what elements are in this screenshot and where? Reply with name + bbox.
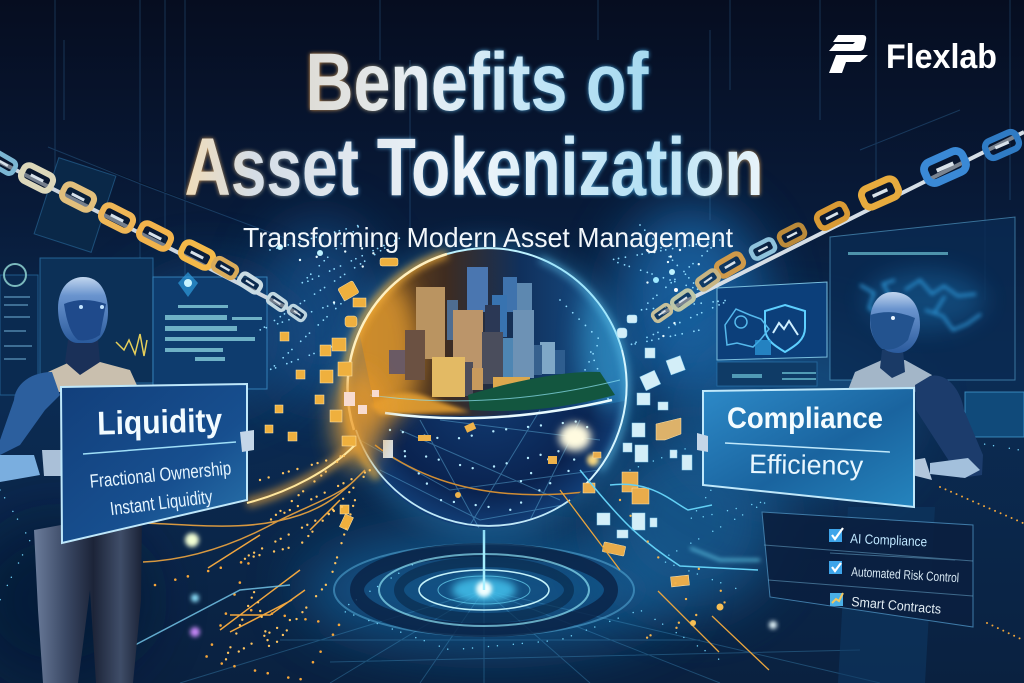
panel: compliance: [703, 388, 914, 507]
left and right panel grip hands: [240, 430, 708, 452]
icon: gear network: [725, 309, 769, 347]
panel heading: compliance: Compliance: [727, 402, 883, 435]
robot head: [58, 277, 108, 343]
logo wordmark: Flexlab: [886, 38, 997, 76]
check item: automated risk control: Automated Risk Control: [851, 564, 960, 585]
robot torso: [48, 362, 140, 392]
robot legs: [34, 510, 142, 683]
equator band: [385, 400, 612, 418]
check item: smart contracts: Smart Contracts: [851, 594, 942, 617]
robot hand: [42, 450, 75, 476]
icon: shield: [765, 305, 805, 352]
robot hand: [901, 458, 932, 480]
checklist panel: [762, 512, 973, 627]
left dashboards: [0, 158, 267, 395]
globe rim: [346, 254, 447, 478]
gold token stream: [135, 258, 398, 680]
panel: liquidity: [61, 384, 247, 543]
check item: automated risk control: [829, 561, 960, 585]
title: Benefits of: [306, 37, 649, 128]
star particles: [0, 225, 1020, 660]
floor radar rings: [180, 530, 880, 683]
blue and white token stream: [560, 315, 1023, 670]
robot lower body: [838, 507, 935, 683]
subtitle: Transforming Modern Asset Management: [243, 222, 733, 253]
title: Benefits of: [306, 37, 649, 128]
title: Asset Tokenization: [184, 122, 764, 213]
right chain: [651, 130, 1024, 323]
panel text: efficiency: Efficiency: [749, 449, 864, 481]
upper hemisphere: [360, 249, 626, 416]
icon: network map: [860, 280, 981, 330]
robot torso: [848, 360, 932, 392]
robot shoulder and arm: [0, 372, 60, 455]
logo icon: [829, 35, 868, 73]
title: Asset Tokenization: [184, 122, 764, 213]
left chain: [0, 151, 307, 322]
foliage: [468, 372, 615, 411]
check item: AI compliance: AI Compliance: [850, 531, 927, 549]
panel heading: liquidity: Liquidity: [97, 401, 223, 442]
title: [184, 37, 764, 213]
left robot: [0, 277, 142, 683]
robot arm: [915, 376, 983, 478]
right robot: [838, 292, 983, 683]
panel text: fractional ownership: Fractional Ownership: [89, 458, 232, 493]
globe with city: [337, 238, 640, 538]
city: [389, 267, 565, 397]
logo: Flexlab: [829, 35, 997, 76]
check item: AI compliance: [829, 528, 927, 549]
robot head: [870, 292, 920, 353]
panel text: instant liquidity: Instant Liquidity: [109, 487, 214, 520]
right dashboards: [717, 217, 1024, 437]
